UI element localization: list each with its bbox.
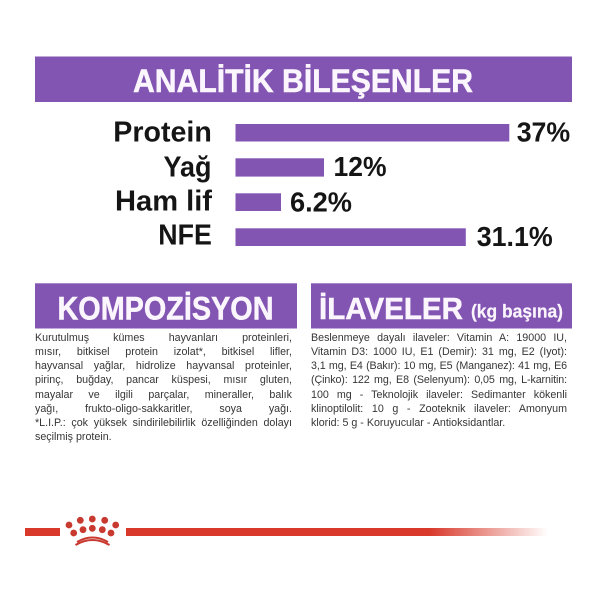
text block: additives: Beslenmeye dayalı ilaveler: Vitamin A: 19000 IU, xyxy=(311,332,567,344)
panel heading: composition: KOMPOZİSYON xyxy=(58,290,274,326)
bar row: NFE: NFE xyxy=(158,219,212,251)
icon: crown xyxy=(66,516,119,545)
bar row: protein: Protein xyxy=(113,117,212,149)
text block: composition: *L.I.P.: çok yüksek sindirilebilirlik özelliğinden dolayı xyxy=(35,417,292,429)
panel heading: additives: (kg başına) xyxy=(471,302,563,322)
text block: additives xyxy=(311,332,567,429)
text block: composition: seçilmiş protein. xyxy=(35,431,112,443)
text block: composition: pirinç, buğday, pancar küspesi, mısır gluten, xyxy=(35,374,292,386)
text block: additives: klorid: 5 g - Koruyucular - Antioksidantlar. xyxy=(311,417,505,429)
footer red line with crown logo xyxy=(25,516,548,545)
bar row: fat: 12% xyxy=(334,151,387,182)
text block: composition: mayalar ve ilgili parçalar, mineraller, balık xyxy=(35,388,292,400)
text block: additives: 3,1 mg, E4 (Bakır): 10 mg, E5 (Manganez): 41 mg, E6 xyxy=(311,360,567,372)
bar row: protein xyxy=(113,117,570,149)
bar chart: analytic components xyxy=(113,117,570,252)
bar row: crude fibre: 6.2% xyxy=(290,186,352,217)
text block: additives: Vitamin D3: 1000 IU, E1 (Demir): 31 mg, E2 (Iyot): xyxy=(311,346,567,358)
text block: composition: Kurutulmuş kümes hayvanları proteinleri, xyxy=(35,332,292,344)
title: ANALİTİK BİLEŞENLER xyxy=(133,63,473,99)
text block: additives: 100 mg - Teknolojik ilaveler: Sedimanter kökenli xyxy=(311,388,567,400)
bar row: fat: Yağ xyxy=(164,152,212,184)
panel heading: additives xyxy=(311,283,572,328)
text block: composition: mısır, bitkisel protein izolat*, bitkisel lifler, xyxy=(35,346,292,358)
text block: composition: hayvansal yağlar, hidrolize hayvansal proteinler, xyxy=(35,360,292,372)
bar row: NFE xyxy=(158,219,553,252)
bar row: protein: 37% xyxy=(517,117,570,148)
text block: composition xyxy=(35,332,292,443)
text block: additives: (Çinko): 122 mg, E8 (Selenyum): 0,05 mg, L-karnitin: xyxy=(311,374,567,386)
bar row: NFE: 31.1% xyxy=(477,221,553,252)
text block: additives: klinoptilolit: 10 g - Zooteknik ilaveler: Amonyum xyxy=(311,403,567,415)
bar row: fat xyxy=(164,151,387,184)
bar row: crude fibre xyxy=(115,186,352,218)
bar row: crude fibre: Ham lif xyxy=(115,186,212,218)
text block: composition: yağı, frukto-oligo-sakkaritler, soya yağı. xyxy=(35,403,292,415)
panel heading: additives: İLAVELER xyxy=(319,292,463,326)
panel: analytic title banner xyxy=(35,56,572,102)
